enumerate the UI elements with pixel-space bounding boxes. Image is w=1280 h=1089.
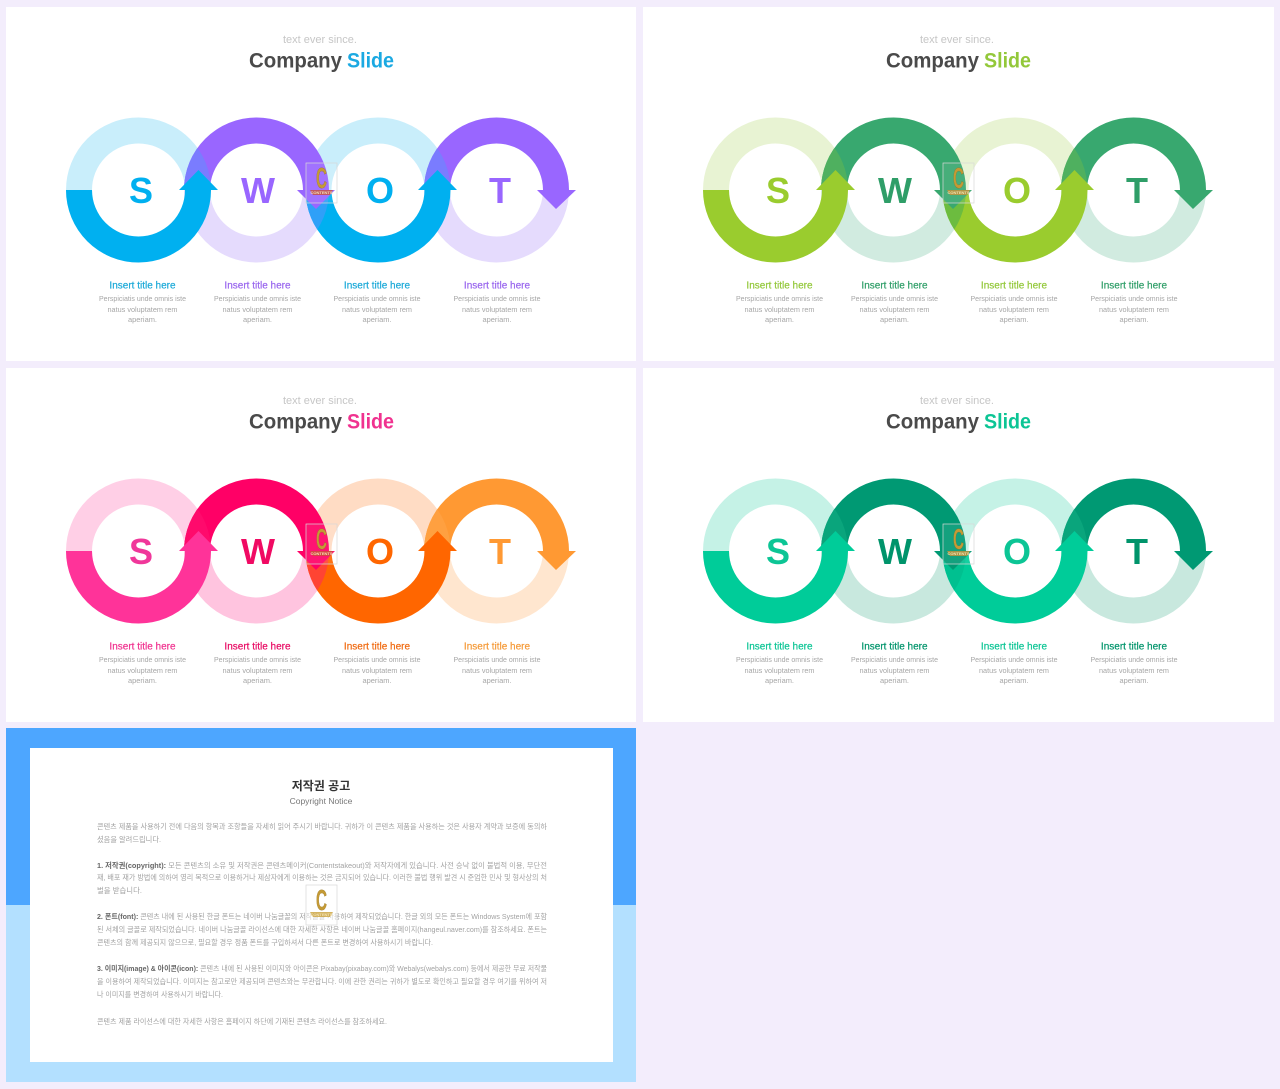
arrow: T arc — [1061, 478, 1213, 570]
column text: W: natus voluptatem rem — [860, 666, 930, 675]
letters S W O T: O — [1003, 170, 1031, 211]
column text: W: aperiam. — [243, 315, 272, 324]
column text: O: Perspiciatis unde omnis iste — [970, 294, 1058, 303]
column text: O — [970, 280, 1058, 324]
watermark badge: CONTENTS — [948, 551, 970, 556]
arrow: O arc — [942, 170, 1094, 262]
column text: S: Perspiciatis unde omnis iste — [736, 655, 823, 664]
watermark badge — [943, 524, 974, 564]
notice closing line: 콘텐츠 제품 라이선스에 대한 자세한 사항은 홈페이지 하단에 기재된 콘텐츠 라이선스를 참조하세요. — [97, 1017, 387, 1026]
column text: W: Insert title here — [861, 642, 928, 652]
watermark badge — [306, 524, 337, 564]
panel: green SWOT slide — [643, 7, 1274, 361]
slide heading: Slide — [347, 410, 394, 434]
column text: S: Perspiciatis unde omnis iste — [99, 294, 186, 303]
column text: S: aperiam. — [128, 676, 157, 685]
letters S W O T: O — [1003, 531, 1031, 572]
notice subtitle: Copyright Notice — [290, 796, 353, 806]
column text: T: aperiam. — [482, 676, 512, 685]
letters S W O T — [129, 531, 511, 572]
column text: O: Perspiciatis unde omnis iste — [334, 655, 420, 664]
column text: W: natus voluptatem rem — [222, 305, 292, 314]
column text: W — [214, 280, 301, 324]
column text: S — [99, 642, 186, 685]
section 2 font — [97, 912, 547, 947]
column text: T — [454, 642, 540, 685]
slide heading: Slide — [347, 50, 394, 72]
column text: T: natus voluptatem rem — [462, 666, 532, 675]
column text: O: Insert title here — [981, 642, 1048, 652]
column text: S: Insert title here — [109, 280, 176, 292]
watermark badge: C — [953, 524, 964, 556]
column text: S: natus voluptatem rem — [744, 305, 814, 314]
column text: W: Insert title here — [224, 280, 291, 292]
section 3 image and icon: 나 이미지를 변경하여 사용하시기 바랍니다. — [97, 990, 223, 999]
slide heading: Company — [249, 410, 342, 434]
letters S W O T: O — [366, 531, 394, 572]
column text: O: natus voluptatem rem — [979, 305, 1049, 314]
column text: S: Insert title here — [746, 280, 813, 292]
slide heading: Slide — [984, 410, 1031, 434]
column text: S: Insert title here — [109, 642, 176, 652]
column text: T — [454, 280, 540, 324]
panel: copyright notice — [6, 728, 636, 1082]
column text: O: Perspiciatis unde omnis iste — [334, 294, 420, 303]
watermark badge: CONTENTS — [948, 190, 970, 195]
column text: S: aperiam. — [128, 315, 157, 324]
watermark badge — [943, 163, 974, 203]
slide subtitle: text ever since. — [283, 34, 357, 46]
column text: O — [970, 642, 1058, 685]
letters S W O T: S — [766, 170, 790, 211]
column text: O — [334, 280, 420, 324]
column text: T: Perspiciatis unde omnis iste — [1090, 655, 1178, 664]
column text: T: natus voluptatem rem — [462, 305, 532, 314]
notice intro — [97, 822, 547, 844]
column text: T: aperiam. — [1120, 676, 1148, 685]
column text: W — [851, 280, 938, 324]
letters S W O T — [766, 531, 1148, 572]
watermark badge: CONTENTS — [310, 551, 333, 556]
watermark badge: CONTENTS — [310, 912, 333, 917]
column text: W: Insert title here — [861, 280, 928, 292]
column text: O — [334, 642, 420, 685]
column text: T: aperiam. — [1120, 315, 1148, 324]
slide heading: Company — [886, 50, 979, 72]
column text: T — [1090, 280, 1178, 324]
column text: O: natus voluptatem rem — [342, 305, 412, 314]
letters S W O T: O — [366, 170, 394, 211]
panel: teal SWOT slide — [643, 368, 1274, 722]
column text: S — [736, 280, 823, 324]
column text: S: Insert title here — [746, 642, 813, 652]
column text: W: natus voluptatem rem — [860, 305, 930, 314]
column text: O: Insert title here — [344, 642, 411, 652]
letters S W O T: W — [878, 531, 912, 572]
slide heading — [886, 410, 1031, 434]
letters S W O T: T — [489, 170, 511, 211]
arrow: W arc — [821, 118, 972, 209]
column text: W: natus voluptatem rem — [222, 666, 292, 675]
column text: O: aperiam. — [1000, 315, 1028, 324]
section 3 image and icon: 3. 이미지(image) & 아이콘(icon): 콘텐츠 내에 된 사용된 이미지와 아이콘은 Pixabay(pixabay.com)와 Webalys(webalys.com) 등에서 제공한 무료 저작물 — [97, 964, 547, 973]
notice title: 저작권 공고 — [292, 778, 350, 793]
column text: T: Insert title here — [1101, 280, 1168, 292]
slide heading: Company — [886, 410, 979, 434]
arrow: O arc — [306, 531, 457, 624]
arrow: O arc — [306, 170, 457, 262]
slide heading — [249, 410, 394, 434]
slide subtitle: text ever since. — [283, 395, 357, 407]
watermark badge: C — [316, 524, 327, 556]
column text: S — [99, 280, 186, 324]
column text: W: Perspiciatis unde omnis iste — [851, 294, 938, 303]
column text: T: Insert title here — [464, 642, 531, 652]
panel: pink and orange SWOT slide — [6, 368, 636, 722]
column text: O: Insert title here — [981, 280, 1048, 292]
letters S W O T: S — [129, 170, 153, 211]
column text: T: natus voluptatem rem — [1099, 305, 1169, 314]
arrow: S arc — [703, 531, 855, 624]
column text: S — [736, 642, 823, 685]
slide heading: Slide — [984, 50, 1031, 72]
letters S W O T: S — [129, 531, 153, 572]
column text: T — [1090, 642, 1178, 685]
letters S W O T: W — [241, 170, 275, 211]
section 1 copyright: 벌을 받습니다. — [97, 886, 142, 895]
arrow: W arc — [184, 118, 335, 209]
column text: S: natus voluptatem rem — [108, 666, 178, 675]
column text: W — [214, 642, 301, 685]
notice intro: 콘텐츠 제품을 사용하기 전에 다음의 항목과 조항들을 자세히 읽어 주시기 바랍니다. 귀하가 이 콘텐츠 제품을 사용하는 것은 사용자 계약과 보증에 동의하 — [97, 822, 547, 831]
column text: O: natus voluptatem rem — [342, 666, 412, 675]
column text: O: aperiam. — [1000, 676, 1028, 685]
SWOT arrow chain — [703, 118, 1213, 262]
slide heading: Company — [249, 50, 342, 72]
column text: S: natus voluptatem rem — [744, 666, 814, 675]
column text: S: natus voluptatem rem — [108, 305, 178, 314]
column text: S: aperiam. — [765, 315, 794, 324]
SWOT arrow chain — [66, 478, 576, 624]
column text: O: aperiam. — [362, 676, 392, 685]
section 3 image and icon — [97, 964, 547, 999]
column text: T: Perspiciatis unde omnis iste — [454, 655, 540, 664]
section 1 copyright: 1. 저작권(copyright): 모든 콘텐츠의 소유 및 저작권은 콘텐츠메이커(Contentstakeout)와 저작자에게 있습니다. 사전 승낙 없이 불법적 이용, 무단전 — [97, 861, 547, 870]
panel: blue and purple SWOT slide — [6, 7, 636, 361]
column text: S: Perspiciatis unde omnis iste — [736, 294, 823, 303]
watermark badge: C — [316, 885, 327, 917]
arrow: T arc — [424, 478, 576, 570]
slide subtitle: text ever since. — [920, 34, 994, 46]
column text: W: Perspiciatis unde omnis iste — [851, 655, 938, 664]
column text: W: Insert title here — [224, 642, 291, 652]
letters S W O T: S — [766, 531, 790, 572]
column text: O: aperiam. — [362, 315, 392, 324]
arrow: S arc — [66, 170, 218, 262]
column text: W: Perspiciatis unde omnis iste — [214, 294, 301, 303]
slide subtitle: text ever since. — [920, 395, 994, 407]
watermark badge: CONTENTS — [310, 190, 333, 195]
section 1 copyright — [97, 861, 547, 895]
column text: T: Perspiciatis unde omnis iste — [1090, 294, 1178, 303]
column text: W: aperiam. — [880, 676, 909, 685]
column text: T: natus voluptatem rem — [1099, 666, 1169, 675]
arrow: T arc — [424, 118, 576, 209]
section 2 font: 된 서체의 글꼴로 제작되었습니다. 네이버 나눔글꼴 라이선스에 대한 자세한 사항은 네이버 나눔글꼴 홈페이지(hangeul.naver.com)를 참조하세요. 폰트는 — [97, 925, 547, 934]
arrow: S arc — [703, 170, 855, 262]
letters S W O T — [129, 170, 511, 211]
arrow: T arc — [1061, 118, 1213, 209]
letters S W O T — [766, 170, 1148, 211]
letters S W O T: T — [1126, 531, 1148, 572]
column text: W — [851, 642, 938, 685]
section 2 font: 2. 폰트(font): 콘텐츠 내에 된 사용된 한글 폰트는 네이버 나눔글꼴의 저작물을 사용하여 제작되었습니다. 한글 외의 모든 폰트는 Windows System에 포함 — [97, 912, 547, 921]
letters S W O T: T — [489, 531, 511, 572]
watermark badge: C — [316, 163, 327, 195]
SWOT arrow chain — [66, 118, 576, 262]
column text: T: aperiam. — [482, 315, 512, 324]
watermark badge — [306, 163, 337, 203]
letters S W O T: W — [878, 170, 912, 211]
column text: S: aperiam. — [765, 676, 794, 685]
letters S W O T: W — [241, 531, 275, 572]
column text: S: Perspiciatis unde omnis iste — [99, 655, 186, 664]
letters S W O T: T — [1126, 170, 1148, 211]
arrow: O arc — [942, 531, 1094, 624]
section 1 copyright: 재, 배포 재가 방법에 의하여 영리 목적으로 이용하거나 제삼자에게 이용하는 것은 금지되어 있습니다. 이러한 불법 행위 발견 시 준엄한 민사 및 형사상의 처 — [97, 873, 547, 882]
section 2 font: 콘텐츠의 함께 제공되지 않으므로, 필요할 경우 정품 폰트를 구입하셔서 다른 폰트로 변경하여 사용하시기 바랍니다. — [97, 938, 433, 947]
arrow: W arc — [821, 478, 972, 570]
column text: O: Perspiciatis unde omnis iste — [970, 655, 1058, 664]
notice intro: 셨음을 알려드립니다. — [97, 835, 161, 844]
slide heading — [249, 50, 394, 72]
column text: O: natus voluptatem rem — [979, 666, 1049, 675]
SWOT arrow chain — [703, 478, 1213, 624]
arrow: W arc — [184, 478, 335, 570]
column text: W: aperiam. — [243, 676, 272, 685]
slide heading — [886, 50, 1031, 72]
column text: O: Insert title here — [344, 280, 411, 292]
watermark badge — [306, 885, 337, 925]
watermark badge: C — [953, 163, 964, 195]
column text: W: Perspiciatis unde omnis iste — [214, 655, 301, 664]
arrow: S arc — [66, 531, 218, 624]
section 3 image and icon: 을 이용하여 제작되었습니다. 이미지는 참고로만 제공되며 콘텐츠와는 무관합니다. 이에 관한 권리는 귀하가 별도로 확인하고 필요할 경우 여기를 위하여 저 — [97, 977, 547, 986]
column text: W: aperiam. — [880, 315, 909, 324]
column text: T: Insert title here — [1101, 642, 1168, 652]
column text: T: Insert title here — [464, 280, 531, 292]
column text: T: Perspiciatis unde omnis iste — [454, 294, 540, 303]
